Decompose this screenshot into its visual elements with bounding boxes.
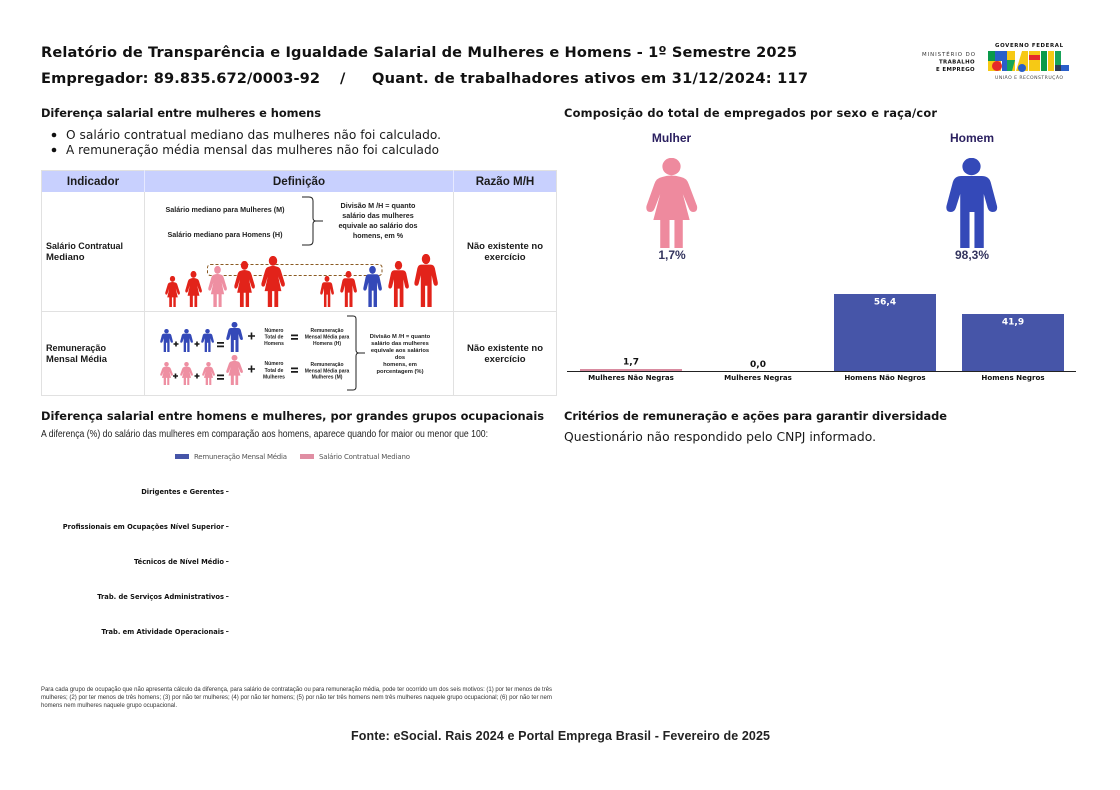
bar chart: sexo e raça/cor: Homens Não Negros xyxy=(844,373,926,382)
labels: mulheres xyxy=(263,361,349,380)
footnote: Para cada grupo de ocupação que não apresenta cálculo da diferença, para salário de contratação ou para remuneração média, pode ter ocorrido um dos seis motivos: (1) por ter menos de três xyxy=(41,686,552,693)
row: remuneração mensal média: Mensal Média xyxy=(46,354,108,365)
logo: ministério e governo federal: UNIÃO E RECONSTRUÇÃO xyxy=(995,74,1063,81)
text: divisão M/H: homens, em xyxy=(383,362,417,368)
panel: diferença por grandes grupos ocupacionais xyxy=(41,409,552,709)
text: divisão M/H: homens, em % xyxy=(353,231,404,240)
logo: ministério e governo federal: E EMPREGO xyxy=(936,67,975,73)
table header: Razão M/H xyxy=(476,175,534,188)
text: divisão M/H xyxy=(338,201,418,240)
pictogram: homem xyxy=(946,131,997,262)
heading: Composição do total de empregados por sexo e raça/cor xyxy=(564,106,937,120)
panel: critérios de remuneração xyxy=(564,409,947,444)
text: divisão M/H: Divisão M /H = quanto xyxy=(341,201,416,210)
bar chart: sexo e raça/cor: 56,4 xyxy=(874,298,896,308)
text: divisão M/H: salário das mulheres xyxy=(371,341,429,347)
source footer: Fonte: eSocial. Rais 2024 e Portal Emprega Brasil - Fevereiro de 2025 xyxy=(351,729,770,743)
logo: ministério e governo federal: GOVERNO FEDERAL xyxy=(995,43,1064,49)
bar chart: sexo e raça/cor: 1,7 xyxy=(623,358,639,368)
table header: Indicador xyxy=(67,175,120,188)
bar chart: sexo e raça/cor: Mulheres Não Negras xyxy=(588,373,674,382)
panel: diferença salarial entre mulheres e homens xyxy=(41,106,441,157)
text: divisão M/H: dos xyxy=(395,355,405,361)
labels: mulheres: Total de xyxy=(265,368,284,374)
page title xyxy=(41,44,808,87)
labels: homens: Homens (H) xyxy=(313,341,341,347)
pictogram: homem: Homem xyxy=(950,131,994,145)
pictogram: mulher: 1,7% xyxy=(658,248,686,262)
page title: Empregador: 89.835.672/0003-92 xyxy=(41,70,320,87)
labels: mulheres: Número xyxy=(265,361,283,367)
razão: salário contratual xyxy=(467,241,543,263)
page title: Relatório de Transparência e Igualdade Salarial de Mulheres e Homens - 1º Semestre 2025 xyxy=(41,44,797,61)
category axis: Trab. de Serviços Administrativos xyxy=(97,593,224,601)
text: divisão M/H xyxy=(370,334,431,375)
logo: ministério e governo federal: MINISTÉRIO DO xyxy=(922,50,975,58)
text: divisão M/H: porcentagem (%) xyxy=(376,369,424,375)
page title: / xyxy=(340,70,346,87)
table: indicadores xyxy=(41,170,557,396)
labels: mulheres: Remuneração xyxy=(310,362,344,368)
operators xyxy=(173,332,298,380)
bar chart: sexo e raça/cor: Homens Negros xyxy=(981,373,1045,382)
row: salário contratual mediano: Salário mediano para Mulheres (M) xyxy=(165,205,285,214)
labels: homens xyxy=(264,328,349,347)
icons: mulheres xyxy=(160,355,243,385)
text block: Questionário não respondido pelo CNPJ informado. xyxy=(564,429,876,444)
bullet list xyxy=(52,127,441,157)
row: salário contratual mediano: Salário Contratual xyxy=(46,241,123,252)
table header xyxy=(41,170,556,192)
logo: ministério e governo federal: TRABALHO xyxy=(939,60,975,66)
labels: mulheres: Mulheres xyxy=(263,374,285,380)
labels: homens: Número xyxy=(265,328,283,334)
footnote: homens nem mulheres naquele grupo ocupacional. xyxy=(41,702,177,709)
razão: salário contratual: Não existente no xyxy=(467,241,543,252)
razão: salário contratual: exercício xyxy=(484,252,526,263)
labels: homens: Mensal Média para xyxy=(305,334,349,340)
razão: remuneração: exercício xyxy=(484,354,526,365)
row: salário contratual mediano: Mediano xyxy=(46,252,85,263)
panel: composição por sexo e raça/cor xyxy=(564,106,1076,382)
text: divisão M/H: salário das mulheres xyxy=(342,211,414,220)
page title: Quant. de trabalhadores ativos em 31/12/2024: 117 xyxy=(372,70,808,87)
text: divisão M/H: equivale ao salário dos xyxy=(338,221,418,230)
row: remuneração mensal média: Remuneração xyxy=(46,343,106,354)
pictogram: mulher xyxy=(646,131,697,262)
footnote xyxy=(41,686,552,709)
labels: homens: Remuneração xyxy=(310,328,344,334)
subtitle: A diferença (%) do salário das mulheres em comparação aos homens, aparece quando for maior ou menor que 100: xyxy=(41,429,488,440)
footnote: mulheres; (2) por ter menos de três homens; (3) por não ter mulheres; (4) por não ter homens; (5) por não ter três homens nem três mulheres naquele grupo ocupacional; (6) por não ter nem xyxy=(41,694,552,701)
legend: Salário Contratual Mediano xyxy=(319,453,410,461)
bar chart: sexo e raça/cor: 0,0 xyxy=(750,360,766,370)
pictogram: homem: 98,3% xyxy=(955,248,989,262)
heading: Diferença salarial entre homens e mulheres, por grandes grupos ocupacionais xyxy=(41,409,544,423)
heading: Critérios de remuneração e ações para garantir diversidade xyxy=(564,409,947,423)
icons: mulheres ordenadas por salário xyxy=(165,256,285,307)
bar chart: sexo e raça/cor: 41,9 xyxy=(1002,318,1024,328)
category axis: Trab. em Atividade Operacionais xyxy=(101,628,224,636)
category axis: Dirigentes e Gerentes xyxy=(141,488,224,496)
category axis: Técnicos de Nível Médio xyxy=(134,558,224,566)
row: salário contratual mediano xyxy=(46,197,543,307)
legend: Remuneração Mensal Média xyxy=(194,453,287,461)
labels: mulheres: Mensal Média para xyxy=(305,368,349,374)
razão: remuneração xyxy=(467,343,543,365)
bullet list: A remuneração média mensal das mulheres não foi calculado xyxy=(66,142,439,157)
razão: remuneração: Não existente no xyxy=(467,343,543,354)
logo: ministério e governo federal xyxy=(922,43,1069,81)
labels: homens: Homens xyxy=(264,341,284,347)
bar chart: sexo e raça/cor xyxy=(567,294,1076,382)
text: divisão M/H: Divisão M /H = quanto xyxy=(370,334,431,340)
labels: mulheres: Mulheres (M) xyxy=(312,374,343,380)
category axis xyxy=(63,488,228,636)
category axis: Profissionais em Ocupações Nível Superior xyxy=(63,523,225,531)
brace xyxy=(347,316,365,390)
pictogram: mulher: Mulher xyxy=(652,131,691,145)
icons: homens ordenados por salário xyxy=(320,254,438,307)
table header: Definição xyxy=(273,175,325,188)
row: salário contratual mediano: Salário mediano para Homens (H) xyxy=(167,230,283,239)
heading: Diferença salarial entre mulheres e homens xyxy=(41,106,321,120)
brace xyxy=(302,197,323,245)
bullet list: O salário contratual mediano das mulheres não foi calculado. xyxy=(66,127,441,142)
text: divisão M/H: equivale aos salários xyxy=(371,348,429,354)
row: remuneração mensal média xyxy=(46,316,543,390)
dashed median box xyxy=(208,264,382,276)
legend xyxy=(175,453,410,461)
bar chart: sexo e raça/cor: Mulheres Negras xyxy=(724,373,792,382)
icons: homens xyxy=(160,322,243,352)
labels: homens: Total de xyxy=(265,334,284,340)
